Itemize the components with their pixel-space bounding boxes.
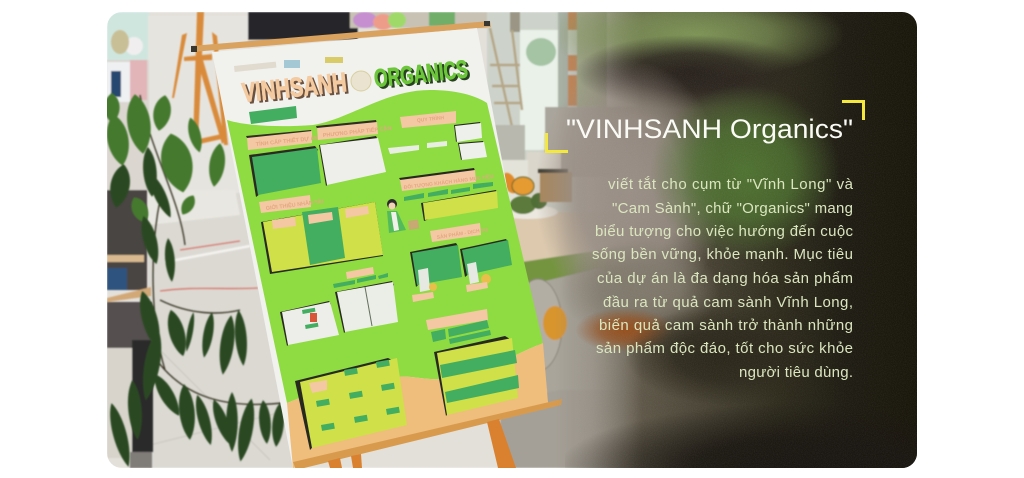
heading: method: PHƯƠNG PHÁP TIẾP CẬN — [322, 125, 392, 139]
illustrated girl — [387, 199, 419, 233]
poster top rail — [191, 21, 491, 52]
team panel — [261, 202, 383, 274]
citrus fruit and jars on table — [498, 169, 572, 219]
bracket: top right — [842, 102, 864, 120]
poster green field — [227, 90, 543, 403]
wooden easel behind — [172, 12, 228, 145]
target customer heading: ĐỐI TƯỢNG KHÁCH HÀNG MỤC TIÊU — [403, 172, 494, 191]
body paragraph: của dự án là đa dạng hóa sản phẩm — [597, 270, 853, 287]
process cards — [388, 122, 487, 160]
product panels — [410, 239, 512, 302]
body paragraph: sống bền vững, khỏe mạnh. Mục tiêu — [592, 246, 853, 263]
body paragraph: "Cam Sành", chữ "Organics" mang — [612, 200, 853, 217]
green text panel — [249, 146, 321, 197]
logos row — [234, 57, 343, 72]
logo card — [280, 301, 339, 346]
heading: team — [259, 195, 324, 213]
products heading — [430, 223, 489, 242]
process heading: QUY TRÌNH — [416, 113, 445, 124]
partners heading and tags — [333, 267, 388, 288]
gradient colour overlay — [535, 12, 917, 468]
body paragraph — [592, 176, 854, 381]
poster title ORGANICS: ORGANICS — [375, 57, 471, 95]
easel legs — [328, 419, 516, 468]
poster title ORGANICS: ORGANICS — [373, 55, 469, 93]
target customer heading — [399, 168, 494, 191]
body paragraph: người tiêu dùng. — [739, 364, 853, 381]
body paragraph: đầu ra từ quả cam sành Vĩnh Long, — [603, 294, 853, 311]
notebook panel — [335, 281, 398, 333]
poster logo circle — [351, 71, 371, 91]
heading: urgency: TÍNH CẤP THIẾT DỰ ÁN — [255, 133, 319, 148]
poster on easel — [191, 21, 548, 468]
white text panel — [319, 136, 386, 186]
poster title VINHSANH: VINHSANH — [240, 67, 348, 108]
coffee plant — [103, 93, 290, 469]
heading: method — [316, 120, 392, 140]
plan table panel — [434, 336, 519, 416]
photo background: room — [107, 12, 667, 468]
body paragraph: sản phẩm độc đáo, tốt cho sức khỏe — [596, 340, 853, 357]
body paragraph: biến quả cam sành trở thành những — [599, 317, 853, 334]
products heading: SẢN PHẨM - DỊCH VỤ — [436, 226, 489, 241]
easel bottom bar — [293, 399, 562, 470]
poster sheet — [212, 28, 548, 468]
poster title VINHSANH: VINHSANH — [243, 69, 350, 110]
left furniture — [107, 30, 153, 468]
photo card — [103, 12, 917, 470]
heading: urgency — [246, 130, 319, 150]
competition heading — [426, 309, 491, 344]
customer panel — [404, 182, 498, 221]
bracket: bottom left — [546, 133, 568, 152]
heading: team: GIỚI THIỆU NHÂN TÀI — [265, 197, 324, 212]
title: "VINHSANH Organics" — [566, 114, 853, 144]
body paragraph: viết tắt cho cụm từ "Vĩnh Long" và — [608, 176, 854, 193]
poster tan footer — [287, 343, 548, 468]
process heading — [400, 111, 456, 128]
poster title ORGANICS — [374, 60, 470, 89]
poster title VINHSANH — [240, 72, 349, 104]
poster rail end caps — [191, 21, 490, 52]
body paragraph: biểu tượng cho việc hướng đến cuộc — [595, 223, 854, 240]
plan panel — [295, 358, 407, 450]
small green tag — [249, 106, 297, 124]
